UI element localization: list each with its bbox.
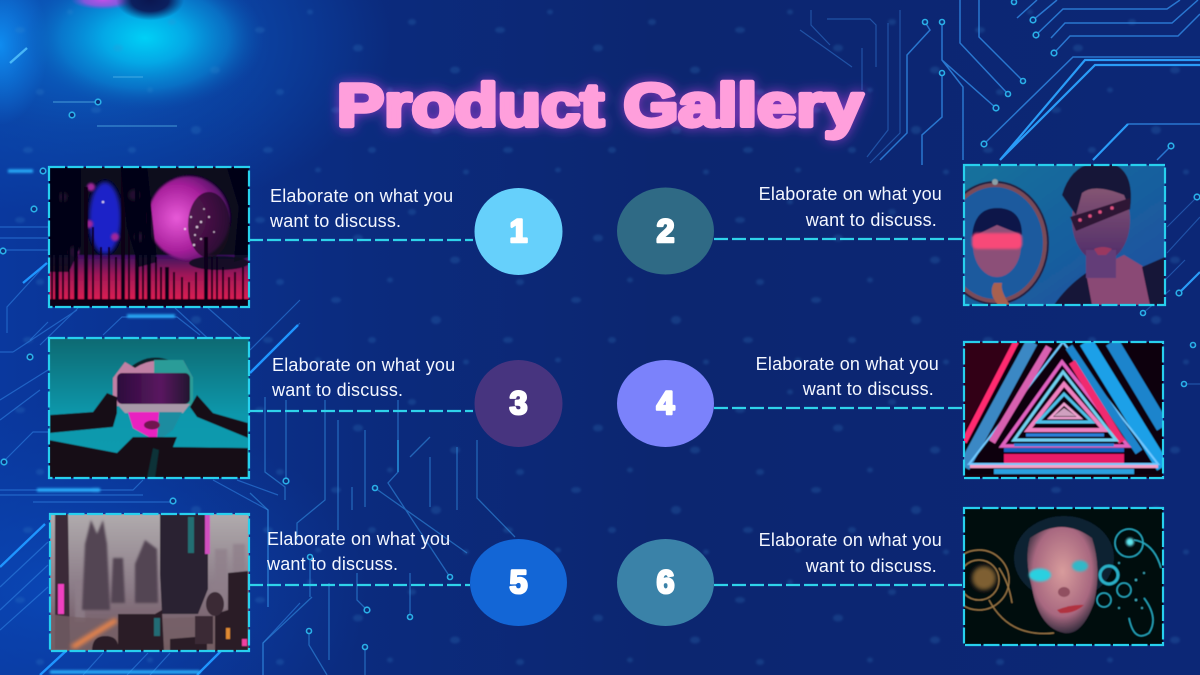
panel: item 2 photo, man and mirror	[942, 162, 1165, 305]
text block 3: want to discuss.	[271, 380, 403, 400]
number badge 2	[617, 188, 714, 274]
text block 2: Elaborate on what you	[759, 184, 942, 204]
traces: top right	[880, 0, 1200, 165]
title: Product Gallery	[337, 72, 864, 139]
panel: item 4 photo, neon triangles	[964, 342, 1163, 478]
bright highlights, left	[0, 48, 298, 675]
text block 3: Elaborate on what you	[272, 355, 455, 375]
text block 5: want to discuss.	[266, 554, 398, 574]
number badge 1	[474, 188, 562, 275]
number badge 4: 4	[657, 385, 675, 421]
number badge 6: 6	[657, 564, 674, 600]
text block 1: Elaborate on what you	[270, 186, 453, 206]
traces: lower middle	[250, 397, 515, 675]
panel: item 1 photo, neon forest and moon	[49, 167, 249, 307]
connector lines	[249, 239, 963, 585]
number badge 1: 1	[510, 213, 527, 249]
traces: left side	[0, 77, 300, 675]
text block 6: Elaborate on what you	[759, 530, 942, 550]
panel: item 6 photo, digital woman face	[949, 508, 1163, 645]
text block 6: want to discuss.	[805, 556, 937, 576]
number badge 4	[617, 360, 714, 447]
text block 5: Elaborate on what you	[267, 529, 450, 549]
panel: item 5 photo, cyberpunk city	[50, 514, 249, 651]
panel: item 3 photo, VR headset	[49, 338, 249, 478]
number badge 3	[474, 360, 562, 447]
text block 4: Elaborate on what you	[756, 354, 939, 374]
text block 2: want to discuss.	[805, 210, 937, 230]
number badge 3: 3	[510, 385, 527, 421]
text block 1: want to discuss.	[269, 211, 401, 231]
number badge 5: 5	[510, 564, 527, 600]
number badge 6	[617, 539, 714, 626]
number badge 5	[470, 539, 567, 626]
number badge 2: 2	[657, 213, 674, 249]
bright diagonal highlights, top right	[1000, 60, 1200, 293]
text block 4: want to discuss.	[802, 379, 934, 399]
